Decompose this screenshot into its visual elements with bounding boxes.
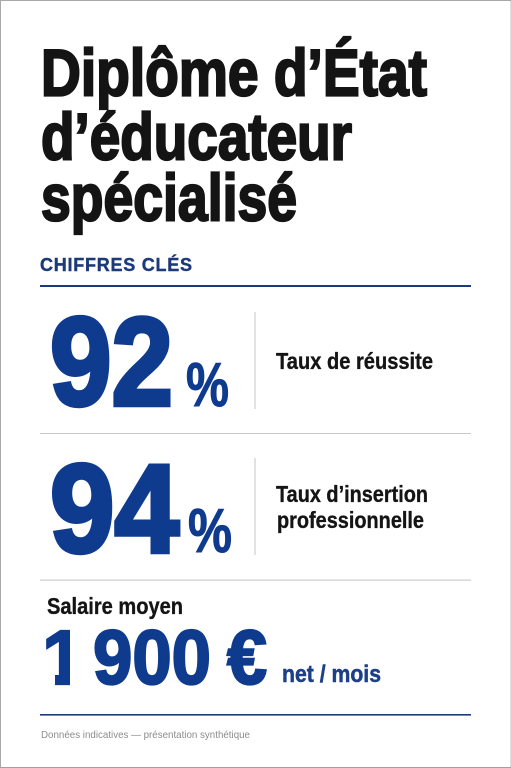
label: salaire moyen: Salaire moyen (47, 593, 183, 619)
label: taux d'insertion professionnelle: professionnelle (277, 507, 424, 533)
panel: salaire moyen (46, 596, 380, 686)
stat: 1 900 €: 900 (93, 615, 211, 701)
panel: taux d'insertion (50, 440, 428, 579)
stat: 1 900 €: 1 (42, 615, 85, 701)
stat: 92 %: % (186, 351, 229, 420)
stat: 92 %: 92 (50, 293, 173, 432)
stat: 94 %: 94 (50, 440, 179, 579)
stat: 94 %: % (188, 497, 232, 566)
title: spécialisé (41, 160, 297, 234)
footnote: Données indicatives — présentation synthétique (41, 729, 250, 741)
title: Diplôme d’État (41, 36, 427, 110)
label: taux d'insertion professionnelle (276, 481, 428, 533)
stat: 1 900 € (46, 628, 267, 686)
stat: 1 900 €: € (227, 615, 267, 701)
unit: net / mois: net / mois (282, 661, 381, 688)
title: d’éducateur (41, 100, 352, 174)
label: taux de réussite: Taux de réussite (276, 348, 433, 374)
panel: taux de réussite (50, 293, 433, 432)
title (41, 36, 427, 234)
label: taux d'insertion professionnelle: Taux d’insertion (276, 481, 428, 507)
section heading: chiffres clés: CHIFFRES CLÉS (40, 254, 192, 275)
